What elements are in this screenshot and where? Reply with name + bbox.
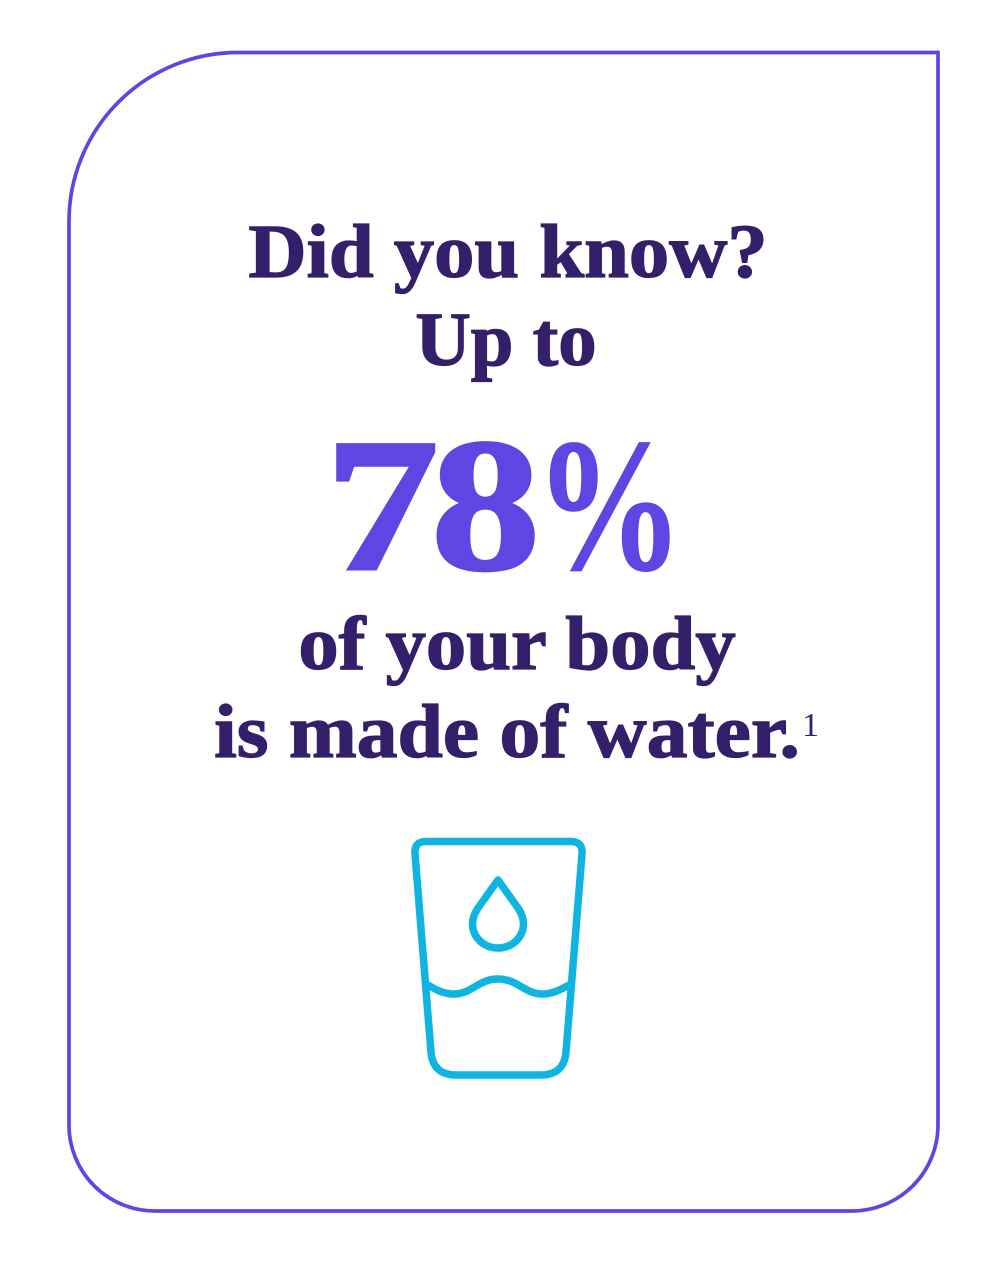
footnote marker: 1 bbox=[802, 707, 819, 744]
statistic: 78 percent bbox=[325, 401, 683, 611]
statistic: 78 percent: 7 bbox=[325, 401, 439, 611]
heading: up to: Up to bbox=[415, 298, 596, 382]
heading: did you know: Did you know? bbox=[248, 210, 767, 294]
icon: glass of water bbox=[411, 838, 586, 1079]
text: is made of water: is made of water. bbox=[214, 690, 799, 774]
statistic: 78 percent: 8 bbox=[430, 401, 540, 611]
text: of your body: of your body bbox=[298, 602, 735, 686]
statistic: 78 percent: % bbox=[534, 401, 683, 611]
